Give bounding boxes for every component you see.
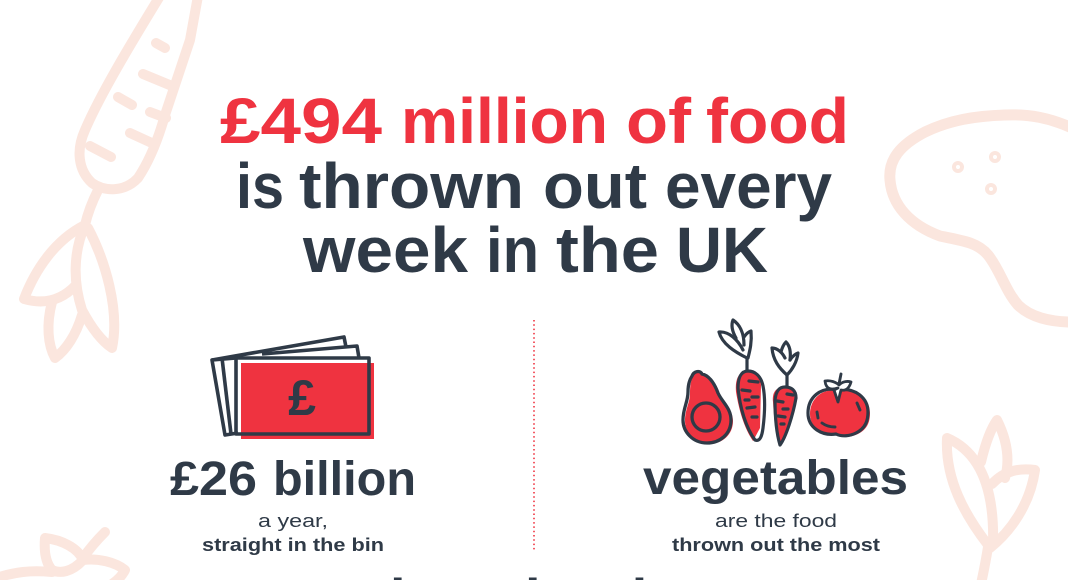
title line 2: thrown xyxy=(299,150,524,222)
panel: vegetables xyxy=(643,320,908,555)
title line 3: week xyxy=(302,214,468,286)
title line 3: the xyxy=(556,214,659,286)
icon: small carrot xyxy=(772,342,798,445)
title line 1 xyxy=(220,85,849,157)
background icon: pale carrot xyxy=(24,0,198,358)
icon: tomato xyxy=(808,374,870,437)
money amount: billion xyxy=(273,453,416,506)
title line 1: £494 xyxy=(220,85,382,157)
title line 1: food xyxy=(706,85,849,157)
money caption line 2: straight in the bin xyxy=(202,534,384,555)
money amount: £26 xyxy=(170,453,257,506)
vegetables caption line 1: are the food xyxy=(715,511,837,531)
money caption line 1: a year, xyxy=(258,511,328,531)
icon: avocado xyxy=(683,372,733,444)
pound symbol: £ xyxy=(288,370,316,426)
title line 3 xyxy=(302,214,768,286)
icon: large carrot xyxy=(719,320,764,441)
vegetables heading: vegetables xyxy=(643,452,908,505)
title xyxy=(220,85,849,286)
title line 2 xyxy=(236,150,832,222)
background icon: pale tomato top xyxy=(0,532,125,580)
vegetables caption line 2: thrown out the most xyxy=(672,534,880,555)
panel: money xyxy=(170,337,416,555)
dotted divider xyxy=(533,320,535,551)
money amount xyxy=(170,453,416,506)
title line 2: is xyxy=(236,150,284,222)
icon: banknotes xyxy=(212,337,374,439)
background icon: pale potato xyxy=(890,115,1068,322)
title line 2: out xyxy=(543,150,647,222)
background icon: pale leaf sprig xyxy=(947,420,1035,580)
title line 3: in xyxy=(486,214,539,286)
title line 3: UK xyxy=(676,214,768,286)
title line 1: million xyxy=(401,85,608,157)
title line 1: of xyxy=(626,85,692,157)
title line 2: every xyxy=(665,150,832,222)
